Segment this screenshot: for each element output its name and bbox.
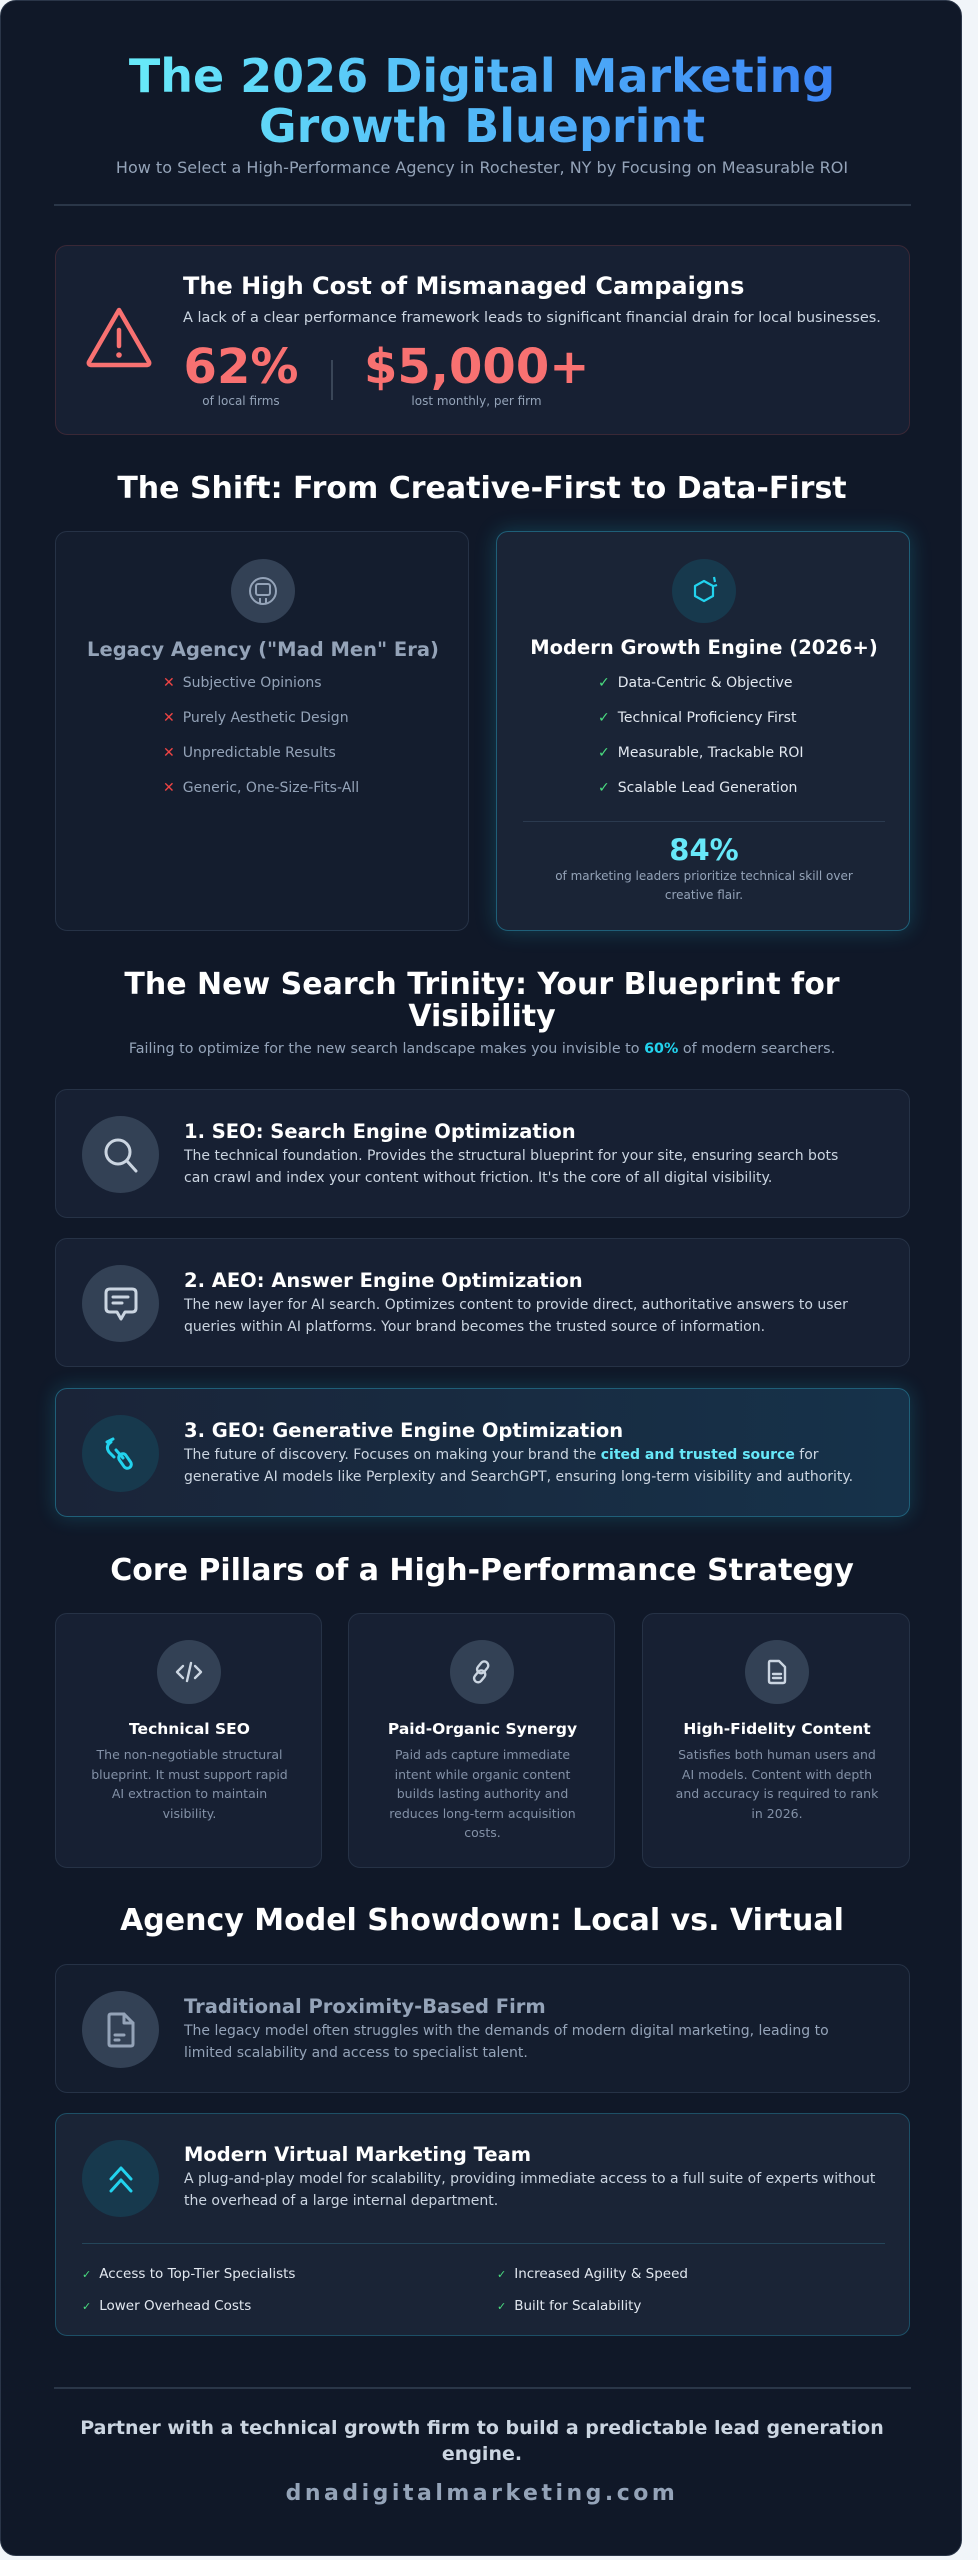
icon: code <box>157 1640 221 1704</box>
list: legacy drawbacks: ✕ Purely Aesthetic Design <box>163 710 349 726</box>
panel: high cost <box>55 245 910 435</box>
list: legacy drawbacks: ✕ Generic, One-Size-Fits-All <box>163 780 359 796</box>
footer call to action: Partner with a technical growth firm to build a predictable lead generation engine. <box>80 2417 884 2465</box>
list: legacy drawbacks: ✕ Subjective Opinions <box>163 675 322 691</box>
panel: modern virtual team <box>55 2113 910 2336</box>
list: benefits: ✓ Lower Overhead Costs <box>82 2298 251 2314</box>
description: A lack of a clear performance framework leads to significant financial drain for local businesses. <box>183 310 881 326</box>
subtitle: trinity: Failing to optimize for the new search landscape makes you invisible to 60% of modern searchers. <box>129 1041 835 1057</box>
title: Technical SEO <box>129 1720 250 1738</box>
icon: search <box>82 1116 159 1193</box>
list: modern benefits: ✓ Measurable, Trackable ROI <box>598 745 803 761</box>
card heading: Legacy Agency ("Mad Men" Era) <box>87 638 439 661</box>
icon: chat bubble <box>82 1265 159 1342</box>
stat: 84%: 84% <box>669 833 739 867</box>
panel: modern growth engine <box>496 531 910 931</box>
description: The technical foundation. Provides the structural blueprint for your site, ensuring search bots can crawl and index your content without friction. It's the core of all digital visibility. <box>184 1148 838 1186</box>
list: benefits <box>82 2266 688 2314</box>
description: The non-negotiable structural blueprint. It must support rapid AI extraction to maintain visibility. <box>91 1747 288 1820</box>
icon: chain <box>450 1640 514 1704</box>
description: A plug-and-play model for scalability, providing immediate access to a full suite of experts without the overhead of a large internal department. <box>184 2171 875 2209</box>
title: Traditional Proximity-Based Firm <box>184 1995 546 2018</box>
footer url: dnadigitalmarketing.com <box>286 2481 678 2506</box>
title <box>1 51 963 151</box>
description: The new layer for AI search. Optimizes content to provide direct, authoritative answers to user queries within AI platforms. Your brand becomes the trusted source of information. <box>184 1297 848 1335</box>
subtitle: How to Select a High-Performance Agency in Rochester, NY by Focusing on Measurable ROI <box>116 158 848 177</box>
panel: legacy agency <box>55 531 469 931</box>
title: 3. GEO: Generative Engine Optimization <box>184 1419 623 1442</box>
icon: file <box>82 1991 159 2068</box>
panel: paid-organic synergy <box>348 1613 615 1868</box>
panel: high-fidelity content <box>642 1613 910 1868</box>
list: modern benefits: ✓ Data-Centric & Objective <box>598 675 793 691</box>
icon: legacy tv <box>231 559 295 623</box>
heading: search trinity: The New Search Trinity: Your Blueprint for Visibility <box>124 967 840 1034</box>
heading: core pillars: Core Pillars of a High-Performance Strategy <box>110 1553 854 1588</box>
panel: traditional firm <box>55 1964 910 2093</box>
title: Growth Blueprint <box>259 99 705 153</box>
stat caption: of marketing leaders prioritize technical skill over creative flair. <box>555 869 853 902</box>
list: benefits: ✓ Built for Scalability <box>497 2298 641 2314</box>
title: Modern Virtual Marketing Team <box>184 2143 531 2166</box>
list: modern benefits: ✓ Scalable Lead Generation <box>598 780 797 796</box>
list: modern benefits: ✓ Technical Proficiency First <box>598 710 796 726</box>
panel: AEO <box>55 1238 910 1367</box>
title: High-Fidelity Content <box>683 1720 871 1738</box>
list: legacy drawbacks <box>163 675 359 796</box>
list: benefits: ✓ Access to Top-Tier Specialists <box>82 2266 295 2282</box>
description: The future of discovery. Focuses on making your brand the cited and trusted source for generative AI models like Perplexity and SearchGPT, ensuring long-term visibility and authority. <box>184 1447 853 1485</box>
icon: hexagon <box>672 559 736 623</box>
heading: the shift: The Shift: From Creative-First to Data-First <box>117 471 847 506</box>
title: Paid-Organic Synergy <box>388 1720 577 1738</box>
card heading: Modern Growth Engine (2026+) <box>530 636 878 659</box>
stat: $5,000+: $5,000+ <box>364 339 589 395</box>
title: 2. AEO: Answer Engine Optimization <box>184 1269 583 1292</box>
description: Satisfies both human users and AI models. Content with depth and accuracy is required to rank in 2026. <box>676 1747 878 1820</box>
heading: agency model: Agency Model Showdown: Local vs. Virtual <box>120 1903 844 1938</box>
list: modern benefits <box>598 675 803 796</box>
panel: SEO <box>55 1089 910 1218</box>
panel: GEO <box>55 1388 910 1517</box>
title: 1. SEO: Search Engine Optimization <box>184 1120 576 1143</box>
heading: The High Cost of Mismanaged Campaigns <box>183 272 744 300</box>
stat: $5,000+: lost monthly, per firm <box>411 394 542 408</box>
icon: link <box>82 1415 159 1492</box>
stat: 62%: of local firms <box>202 394 280 408</box>
icon: document <box>745 1640 809 1704</box>
stat: 62%: 62% <box>184 339 298 395</box>
icon: chevrons up <box>82 2140 159 2217</box>
list: benefits: ✓ Increased Agility & Speed <box>497 2266 688 2282</box>
icon: warning <box>86 308 152 368</box>
panel: technical seo <box>55 1613 322 1868</box>
description: Paid ads capture immediate intent while organic content builds lasting authority and reduces long-term acquisition costs. <box>389 1747 576 1840</box>
title: The 2026 Digital Marketing <box>129 49 835 103</box>
description: The legacy model often struggles with the demands of modern digital marketing, leading to limited scalability and access to specialist talent. <box>184 2023 829 2061</box>
list: legacy drawbacks: ✕ Unpredictable Results <box>163 745 336 761</box>
